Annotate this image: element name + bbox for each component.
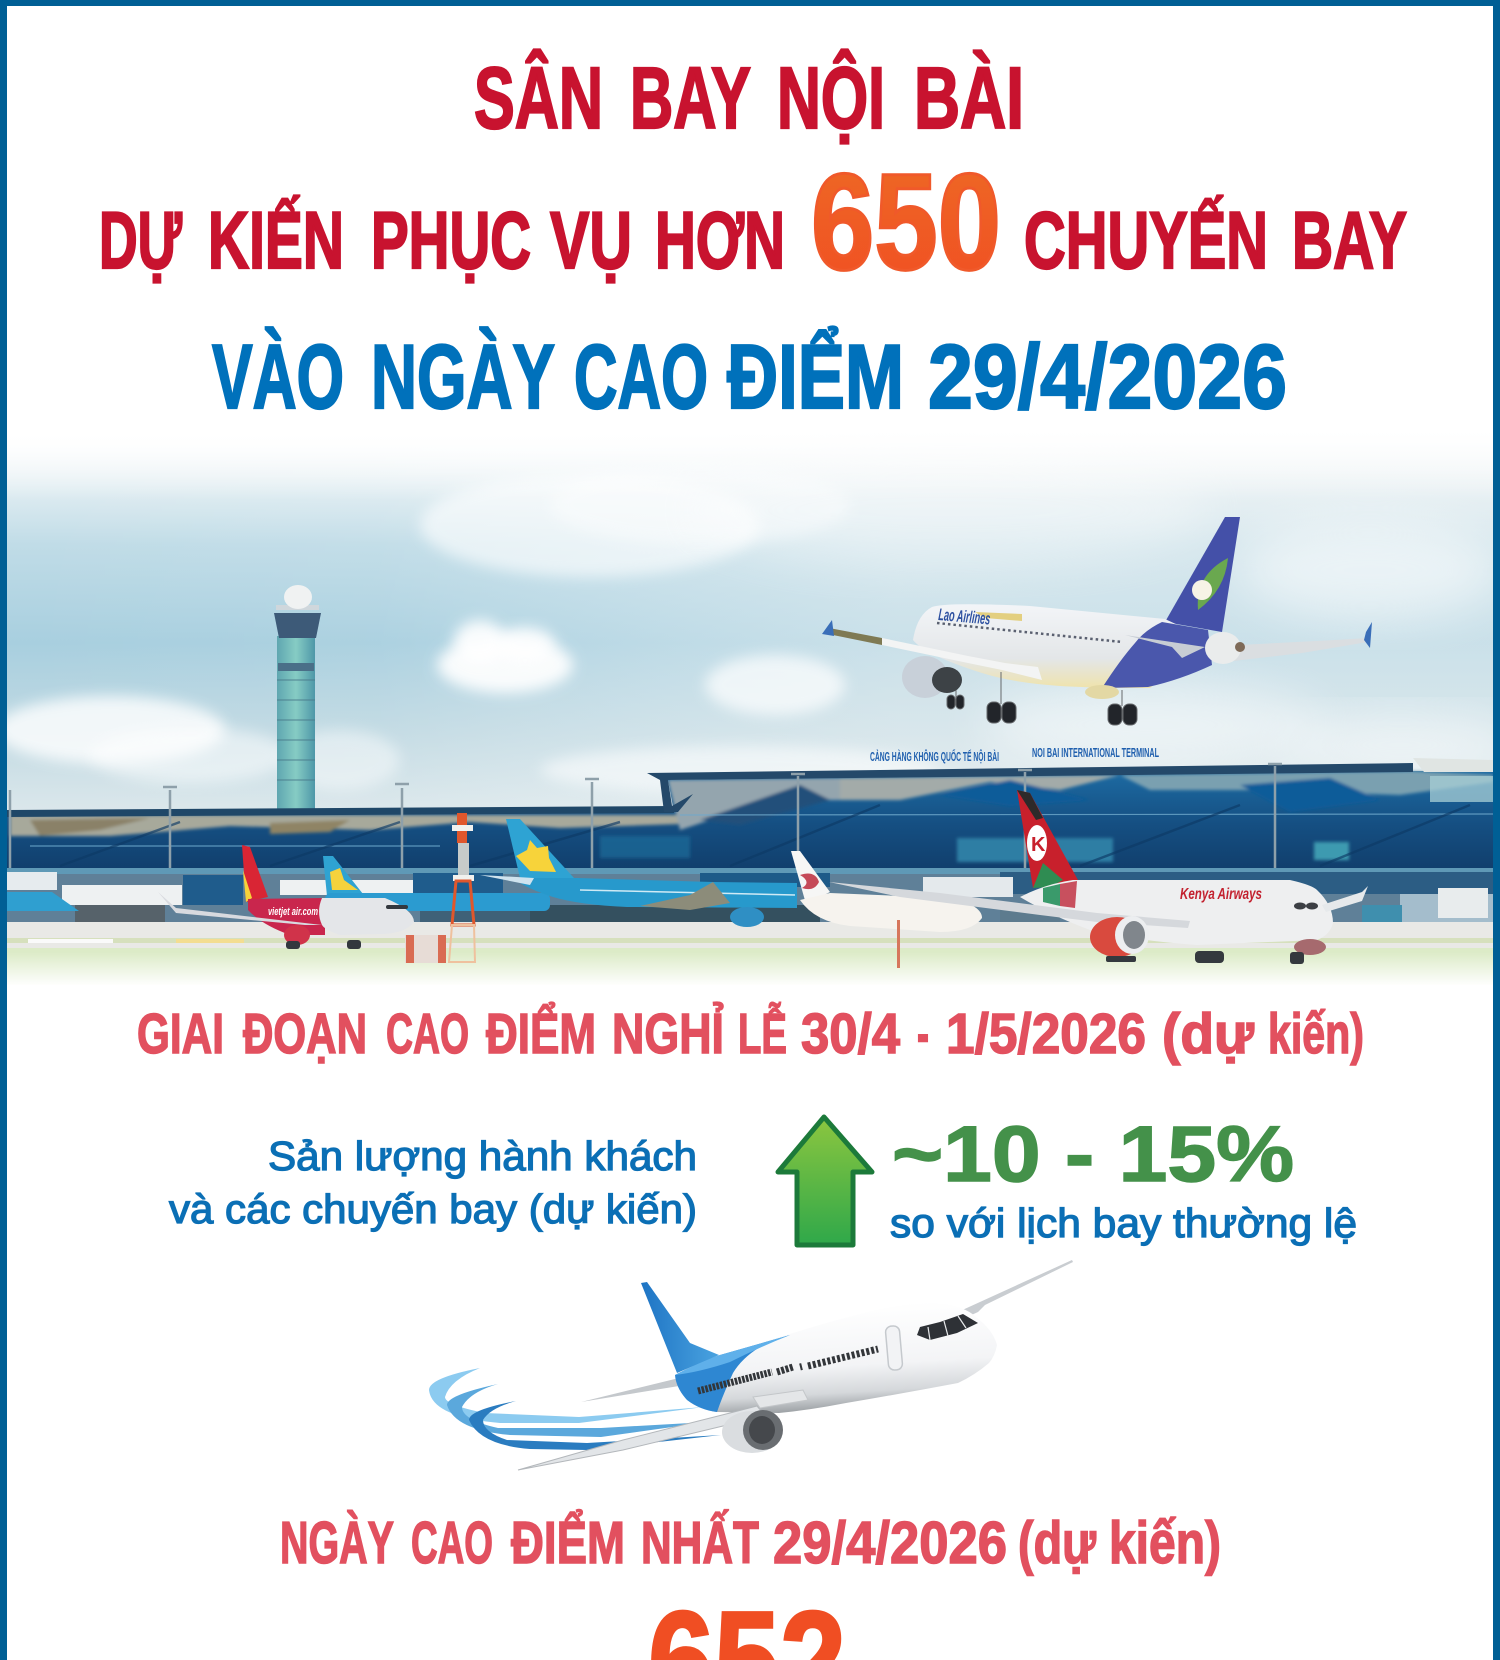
Kenya Airways aircraft — [829, 790, 1368, 968]
wing root fairing — [753, 1390, 808, 1408]
ground and grass — [7, 922, 1493, 997]
clouds — [0, 455, 1500, 794]
title line 2 left: HƠN — [655, 196, 785, 286]
light poles — [10, 764, 1282, 876]
Kenya Airways aircraft: K — [1031, 834, 1046, 856]
title line 2 right: CHUYẾN — [1024, 195, 1268, 286]
label line 2: và các chuyến bay (dự kiến) — [169, 1186, 697, 1232]
blue rear section — [675, 1335, 790, 1412]
stat: 10 to 15 percent: ~10 - 15% — [892, 1109, 1294, 1198]
China Eastern aircraft — [791, 851, 982, 932]
title line 1 — [474, 50, 1024, 147]
fuselage — [913, 604, 1210, 688]
control tower — [274, 585, 321, 809]
terminal building — [7, 758, 1493, 868]
title line 1: BÀI — [914, 50, 1024, 147]
Lao Airlines aircraft landing — [822, 517, 1372, 725]
heading: busiest day: (dự — [1018, 1510, 1096, 1576]
heading: holiday peak period: NGHỈ — [612, 1001, 724, 1066]
title line 2 left: DỰ — [99, 196, 183, 286]
heading: holiday peak period: - — [917, 1002, 929, 1066]
title line 3: NGÀY — [371, 327, 555, 428]
heading: holiday peak period: CAO — [386, 1002, 469, 1066]
fuselage — [675, 1303, 997, 1413]
title line 2 left: PHỤC — [371, 196, 531, 286]
VietJet aircraft — [158, 845, 414, 949]
illustration: passenger aircraft with swoosh — [429, 1260, 1073, 1470]
label line 1: Sản lượng hành khách — [268, 1133, 697, 1179]
engine — [902, 656, 948, 698]
highlighted number 650: 650 — [811, 146, 1001, 299]
VietJet aircraft: vietjet air.com — [268, 906, 318, 918]
right upper reflection — [668, 778, 840, 830]
heading: busiest day: NGÀY — [280, 1510, 394, 1576]
heading: holiday peak period: 1/5/2026 — [946, 1002, 1146, 1066]
heading: holiday peak period: GIAI — [137, 1002, 224, 1066]
tail stabilizer — [581, 1378, 679, 1402]
heading: holiday peak period: kiến) — [1268, 1002, 1364, 1066]
purple rear — [1102, 622, 1212, 688]
door — [885, 1325, 903, 1371]
sign English: NOI BAI INTERNATIONAL TERMINAL — [1032, 745, 1159, 760]
tail fin — [1165, 517, 1240, 632]
fuselage — [1020, 880, 1333, 945]
Lao Airlines aircraft landing: Lao Airlines — [938, 605, 991, 629]
passenger windows — [698, 1349, 878, 1391]
top fade — [7, 430, 1493, 500]
title line 2 left: KIẾN — [208, 195, 344, 286]
heading: holiday peak period: ĐIỂM — [486, 1001, 596, 1066]
heading: holiday peak period — [137, 1001, 1364, 1066]
title line 3 — [212, 326, 1287, 428]
winglet — [1322, 886, 1368, 912]
near wing — [518, 1406, 762, 1470]
icon: green up arrow — [778, 1117, 872, 1245]
heading: holiday peak period: LỄ — [738, 1001, 787, 1066]
title line 1: NỘI — [777, 50, 885, 147]
sky — [7, 430, 1493, 840]
sign Vietnamese: CẢNG HÀNG KHÔNG QUỐC TẾ NỘI BÀI — [870, 749, 999, 764]
heading: holiday peak period: (dự — [1162, 1002, 1255, 1066]
landing gear — [947, 672, 1137, 725]
engine — [722, 1410, 783, 1453]
small aircraft left edge — [7, 892, 79, 911]
glass facade — [7, 771, 1493, 868]
Kenya Airways aircraft: Kenya Airways — [1180, 886, 1262, 903]
roofs — [7, 806, 674, 817]
orange and white radar mast — [405, 813, 475, 963]
airport photo panel — [0, 430, 1500, 997]
apron buildings and jet bridges — [7, 868, 1493, 925]
title line 1: SÂN — [474, 50, 603, 147]
tail cone — [1205, 632, 1241, 664]
wing — [829, 882, 1190, 928]
heading: holiday peak period: 30/4 — [801, 1002, 900, 1066]
terminal sign — [870, 745, 1159, 764]
right stabilizer — [1225, 638, 1368, 662]
title line 2 right: BAY — [1292, 196, 1407, 286]
belly fairing — [1085, 685, 1119, 699]
near wing — [882, 638, 1042, 680]
tail fin — [1017, 790, 1078, 888]
heading: busiest day: ĐIỂM — [511, 1510, 625, 1576]
title line 3: CAO — [574, 327, 708, 428]
title line 3: VÀO — [212, 327, 344, 428]
title line 3: ĐIỂM — [727, 326, 904, 428]
heading: busiest day: kiến) — [1109, 1510, 1221, 1576]
large Vietnam Airlines aircraft — [480, 819, 797, 927]
engine — [1090, 917, 1144, 957]
stat caption: so với lịch bay thường lệ — [890, 1200, 1357, 1246]
heading: busiest day: NHẤT — [641, 1510, 759, 1576]
landing gear — [1106, 951, 1304, 964]
left upper reflection band — [10, 771, 1493, 862]
title line 2 left: VỤ — [550, 196, 632, 286]
heading: busiest day — [280, 1510, 1221, 1576]
teal window panels — [957, 838, 1113, 862]
title block — [99, 50, 1407, 428]
title line 1: BAY — [630, 50, 751, 147]
left stabilizer — [1125, 635, 1205, 658]
Vietnam Airlines aircraft behind — [323, 856, 550, 922]
heading: busiest day: CAO — [411, 1510, 493, 1576]
window row — [937, 623, 1122, 642]
swoosh — [429, 1368, 721, 1450]
title line 3: 29/4/2026 — [928, 327, 1287, 428]
tail fin — [641, 1282, 719, 1373]
far wing — [958, 1260, 1073, 1318]
heading: busiest day: 29/4/2026 — [773, 1510, 1007, 1576]
label: passengers and flights — [169, 1133, 697, 1232]
title line 2 left — [99, 195, 785, 286]
cockpit windows — [917, 1314, 978, 1340]
heading: holiday peak period: ĐOẠN — [243, 1002, 367, 1066]
